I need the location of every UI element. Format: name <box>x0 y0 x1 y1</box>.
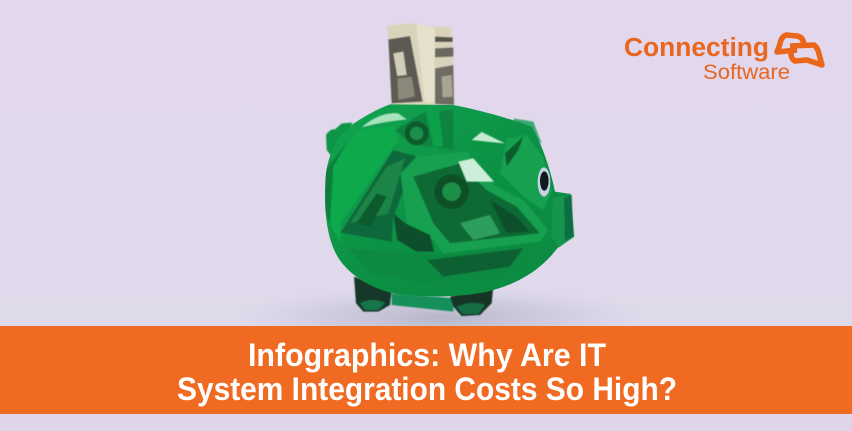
title: System Integration Costs So High? <box>177 371 677 407</box>
pig body <box>325 104 574 296</box>
highlights <box>362 113 505 182</box>
head <box>500 135 552 210</box>
pig interior <box>325 107 552 283</box>
slot fold <box>395 110 453 150</box>
pig feet <box>354 277 493 316</box>
lower fold <box>350 249 370 258</box>
piggy bank <box>325 23 574 316</box>
main fold <box>401 152 548 253</box>
pig ear back <box>513 118 542 143</box>
curled edge <box>393 213 434 252</box>
logo wordmark: Connecting <box>624 34 769 62</box>
logo wordmark <box>624 34 790 84</box>
floor shadow <box>240 286 640 350</box>
pig snout <box>552 194 574 247</box>
pig tail nub <box>326 123 353 158</box>
dollar bill in slot <box>387 23 454 105</box>
title bar <box>0 326 852 414</box>
logo wordmark: Software <box>703 61 790 84</box>
title <box>177 337 677 407</box>
clear panel <box>327 125 398 243</box>
title: Infographics: Why Are IT <box>248 337 606 373</box>
logo <box>624 34 822 84</box>
left note fold <box>341 150 417 242</box>
logo icon: linked speech bubbles <box>777 35 822 65</box>
pig eye <box>538 167 550 197</box>
